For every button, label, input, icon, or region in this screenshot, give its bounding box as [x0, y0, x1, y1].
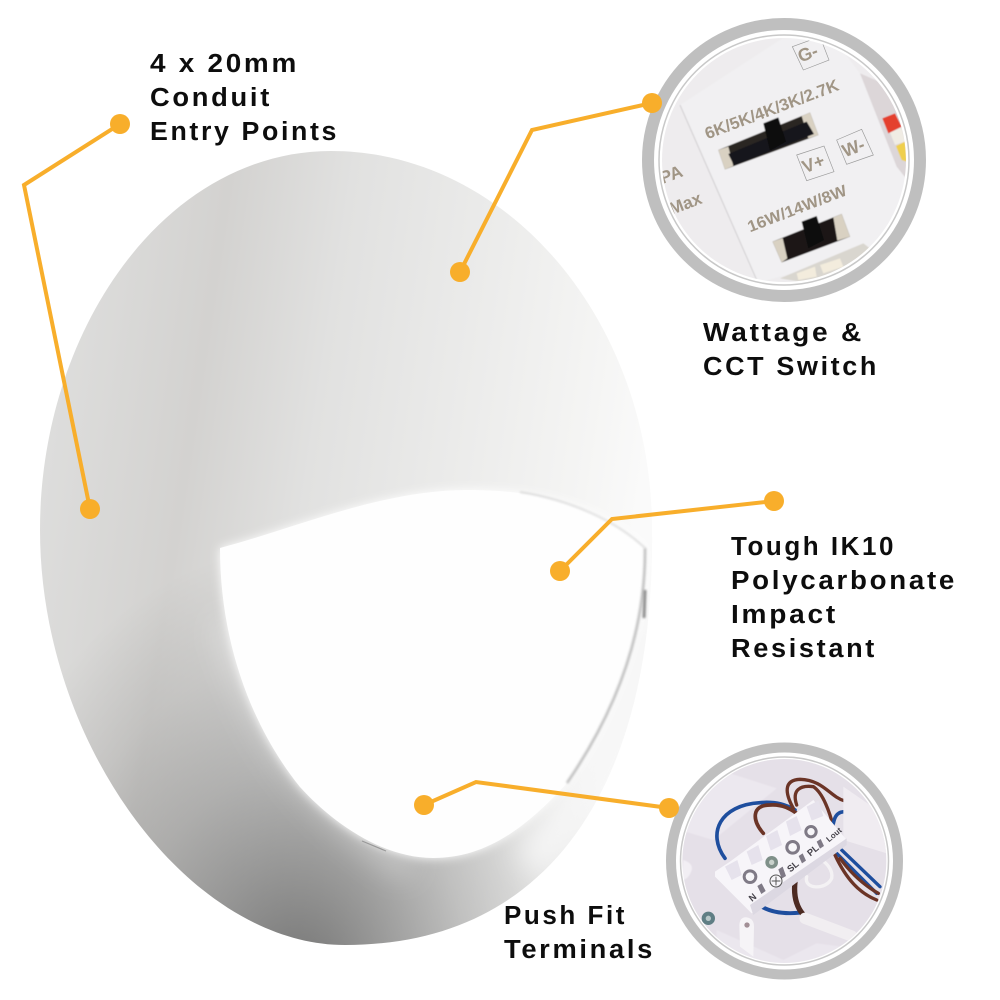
callout line: wattage and CCT switch	[450, 93, 662, 282]
label: tough IK10 polycarbonate: Polycarbonate	[731, 567, 957, 595]
lamp body	[40, 151, 626, 945]
switch labels: 16W/14W/8W	[745, 182, 850, 236]
label: conduit entry points: Conduit	[150, 84, 272, 112]
switch labels: V+	[799, 150, 827, 177]
label: tough IK10 polycarbonate: Resistant	[731, 635, 877, 663]
terminal block: N	[747, 891, 759, 904]
photo circle: push fit terminals	[671, 748, 898, 974]
label: tough IK10 polycarbonate	[731, 533, 957, 663]
lens glow	[220, 490, 645, 858]
switch labels: W-	[839, 134, 868, 161]
label: tough IK10 polycarbonate: Impact	[731, 601, 838, 629]
terminal block	[715, 800, 847, 915]
callout line: polycarbonate	[550, 491, 784, 581]
mounting post and screw	[702, 912, 754, 957]
lens	[220, 490, 645, 858]
label: conduit entry points: 4 x 20mm	[150, 50, 299, 78]
label: wattage and CCT switch: CCT Switch	[703, 353, 879, 381]
terminal block: PL	[805, 843, 821, 858]
label: push fit terminals: Terminals	[504, 936, 655, 964]
label: wattage and CCT switch	[703, 319, 879, 381]
switch labels: Max	[666, 188, 705, 219]
switch labels	[657, 37, 873, 236]
label: conduit entry points: Entry Points	[150, 118, 339, 146]
switch labels: G-	[795, 41, 821, 66]
switch labels: 6K/5K/4K/3K/2.7K	[702, 76, 841, 143]
terminal block: SL	[785, 859, 801, 874]
label: tough IK10 polycarbonate: Tough IK10	[731, 533, 896, 561]
label: push fit terminals	[504, 902, 655, 964]
callout line: push fit terminals	[414, 782, 679, 818]
photo circle: wattage and CCT switch	[648, 24, 920, 296]
wires	[717, 779, 880, 936]
switch labels: PA	[657, 161, 686, 188]
label: conduit entry points	[150, 50, 339, 146]
callout line: conduit entry points	[24, 114, 130, 519]
terminal block: Lout	[824, 826, 844, 844]
label: push fit terminals: Push Fit	[504, 902, 627, 930]
label: wattage and CCT switch: Wattage &	[703, 319, 864, 347]
